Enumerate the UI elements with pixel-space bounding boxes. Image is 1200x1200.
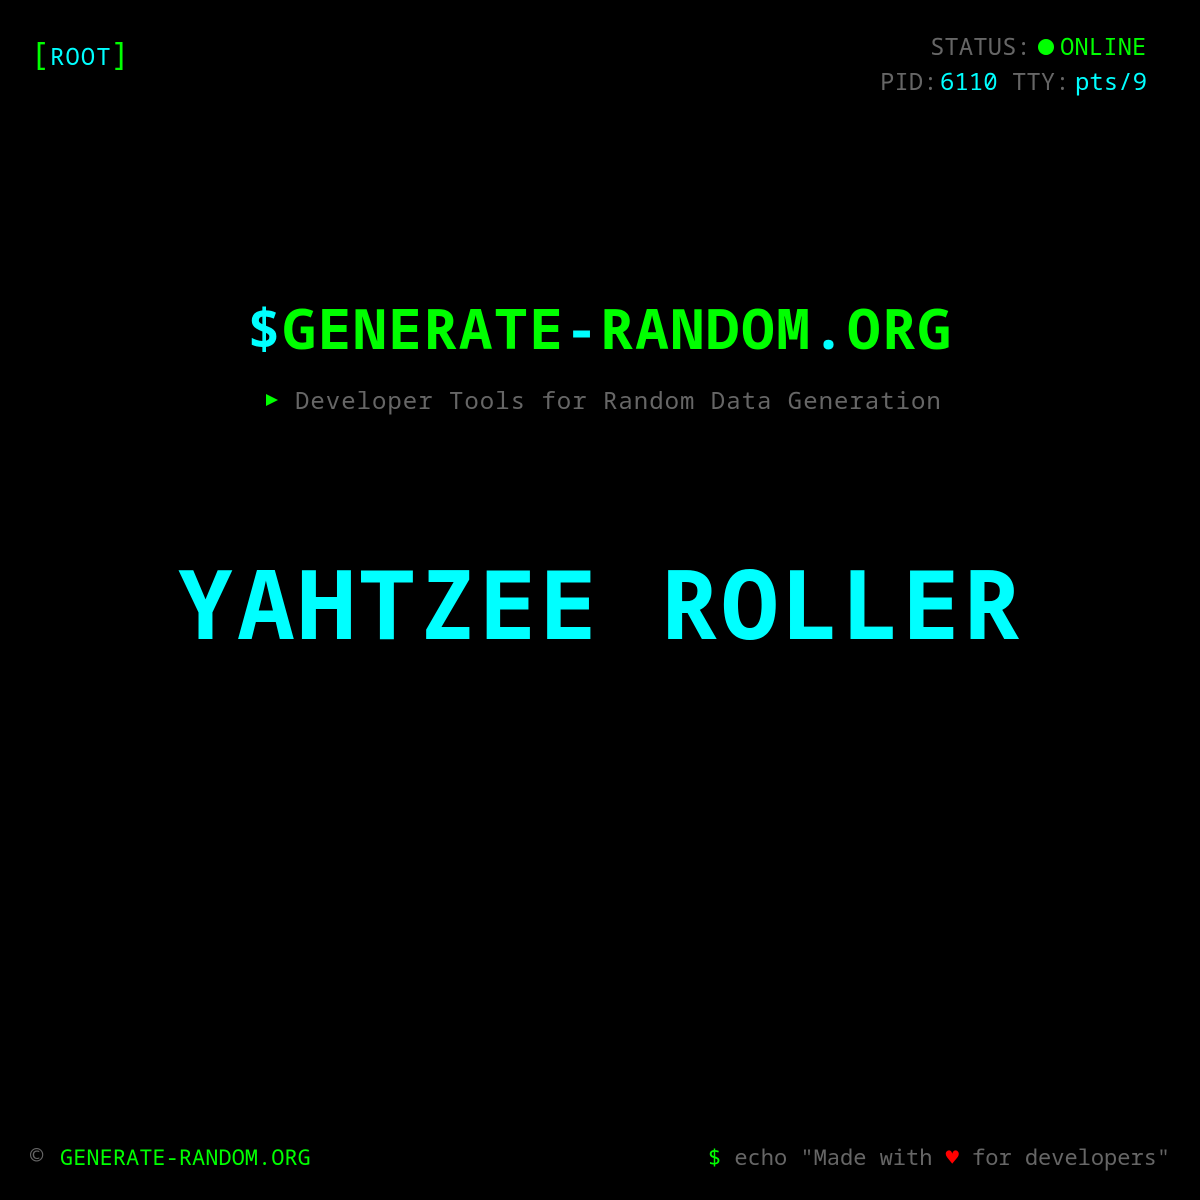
- process info line: TTY:: [1012, 65, 1070, 98]
- main title: YAHTZEE ROLLER: [177, 537, 1023, 668]
- root badge: [: [30, 32, 49, 75]
- status line: STATUS:: [930, 30, 1031, 63]
- footer copyright: ©: [30, 1144, 43, 1169]
- status dot: [1038, 39, 1054, 55]
- online label: ONLINE: [1060, 30, 1146, 63]
- process info line: PID:: [880, 65, 938, 98]
- root badge: ]: [111, 32, 130, 75]
- subtitle text: Developer Tools for Random Data Generation: [295, 384, 942, 417]
- root badge: [30, 32, 130, 75]
- status line: [930, 30, 1146, 63]
- footer echo command: $ echo "Made with ♥ for developers": [708, 1142, 1170, 1172]
- brand heading: $GENERATE-RANDOM.ORG: [247, 290, 953, 366]
- subtitle: [266, 384, 942, 417]
- process info line: pts/9: [1075, 65, 1147, 98]
- root badge: ROOT: [50, 40, 112, 73]
- icon: play arrow: [266, 394, 278, 406]
- footer copyright: GENERATE-RANDOM.ORG: [60, 1142, 311, 1172]
- process info line: 6110: [940, 65, 998, 98]
- process info line: [880, 65, 1147, 98]
